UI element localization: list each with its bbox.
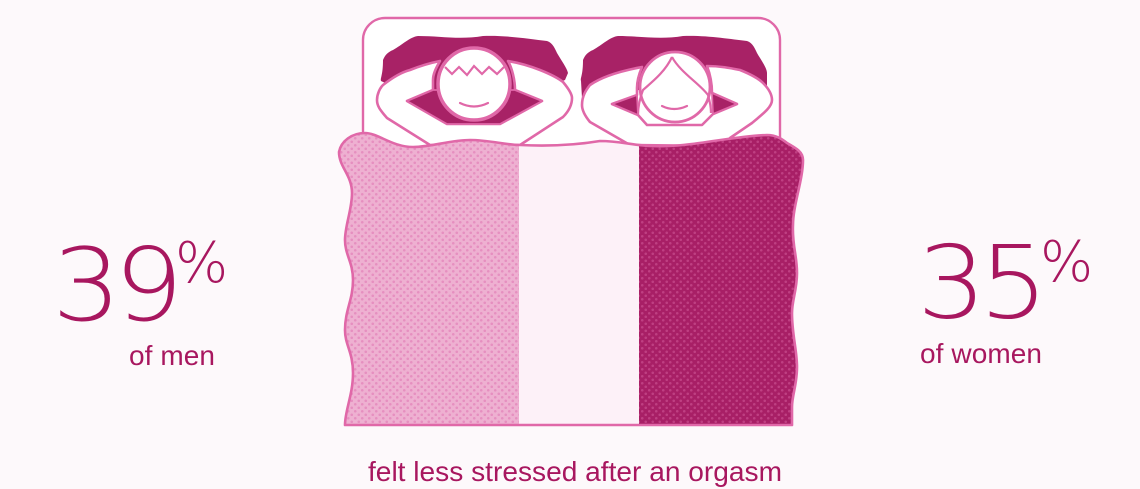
statistic: 35% of women: of women — [920, 338, 1042, 369]
icon: man lying in bed — [377, 36, 572, 145]
statistic: 35% of women: % — [1040, 230, 1093, 295]
duvet — [335, 125, 809, 430]
icon: woman lying in bed — [581, 36, 772, 146]
caption: felt less stressed after an orgasm — [368, 456, 782, 487]
statistic: 35% of women — [917, 223, 1093, 369]
statistic: 39% of men — [52, 226, 228, 371]
statistic: 39% of men: % — [175, 231, 228, 296]
statistic: 39% of men: of men — [129, 340, 215, 371]
duvet: women's section — [639, 125, 809, 430]
headboard — [363, 18, 780, 168]
statistic: 39% of men: 39 — [52, 226, 176, 344]
duvet: middle section — [519, 142, 639, 170]
duvet: men's section — [335, 125, 519, 430]
statistic: 35% of women: 35 — [917, 223, 1041, 342]
